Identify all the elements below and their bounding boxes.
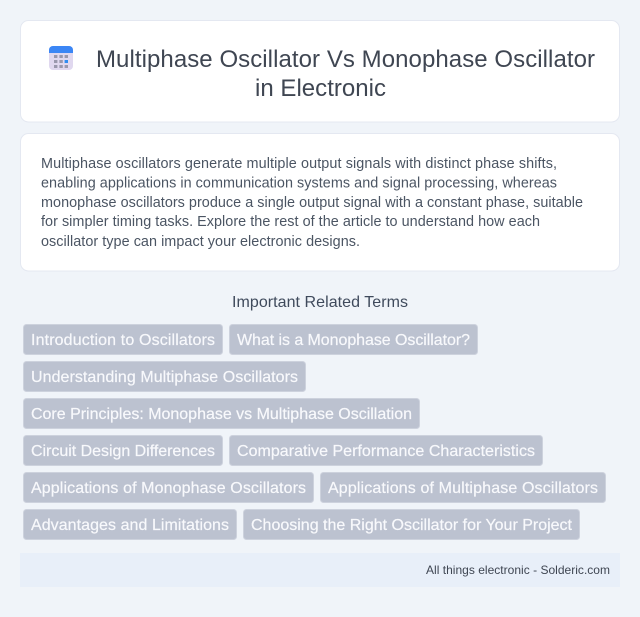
- title: in Electronic: [255, 75, 386, 102]
- tag: introduction: [24, 324, 222, 354]
- tag: performance: [230, 436, 542, 466]
- intro paragraph: monophase oscillators produce a single output signal with a constant phase, suitable: [41, 195, 583, 211]
- title: [96, 46, 595, 102]
- tag: monophase applications: [24, 472, 314, 502]
- tag: monophase definition: What is a Monophase Oscillator?: [237, 332, 470, 349]
- intro paragraph: Multiphase oscillators generate multiple output signals with distinct phase shifts,: [41, 156, 557, 172]
- footer: All things electronic - Solderic.com: [426, 563, 610, 577]
- intro paragraph: oscillator type can impact your electronic designs.: [41, 234, 360, 250]
- panel: title card: [20, 20, 620, 122]
- tag: understanding multiphase: [24, 362, 306, 392]
- tag: advantages: Advantages and Limitations: [31, 517, 229, 534]
- tag: advantages: [24, 510, 236, 540]
- tag: core principles: [24, 398, 420, 428]
- panel: intro text card: [20, 134, 620, 271]
- tag: monophase definition: [230, 324, 478, 354]
- tag: performance: Comparative Performance Characteristics: [237, 443, 535, 460]
- tag: understanding multiphase: Understanding Multiphase Oscillators: [31, 369, 298, 386]
- tag: introduction: Introduction to Oscillators: [31, 332, 215, 349]
- heading: important related terms: Important Related Terms: [232, 294, 408, 311]
- intro paragraph: enabling applications in communication systems and signal processing, whereas: [41, 176, 557, 192]
- title: Multiphase Oscillator Vs Monophase Oscillator: [96, 46, 595, 73]
- footer: [20, 553, 620, 587]
- intro paragraph: for simpler timing tasks. Explore the rest of the article to understand how each: [41, 214, 540, 230]
- tag: core principles: Core Principles: Monophase vs Multiphase Oscillation: [31, 406, 412, 423]
- icon: calendar grid: [49, 46, 73, 70]
- tag: multiphase applications: Applications of Multiphase Oscillators: [328, 480, 598, 497]
- tag: multiphase applications: [320, 472, 606, 502]
- tag list: [24, 324, 606, 540]
- tag: choosing: Choosing the Right Oscillator for Your Project: [251, 517, 573, 534]
- tag: circuit design: Circuit Design Differences: [31, 443, 215, 460]
- intro paragraph: [41, 156, 583, 250]
- tag: monophase applications: Applications of Monophase Oscillators: [31, 480, 306, 497]
- tag: circuit design: [24, 436, 222, 466]
- tag: choosing: [244, 510, 580, 540]
